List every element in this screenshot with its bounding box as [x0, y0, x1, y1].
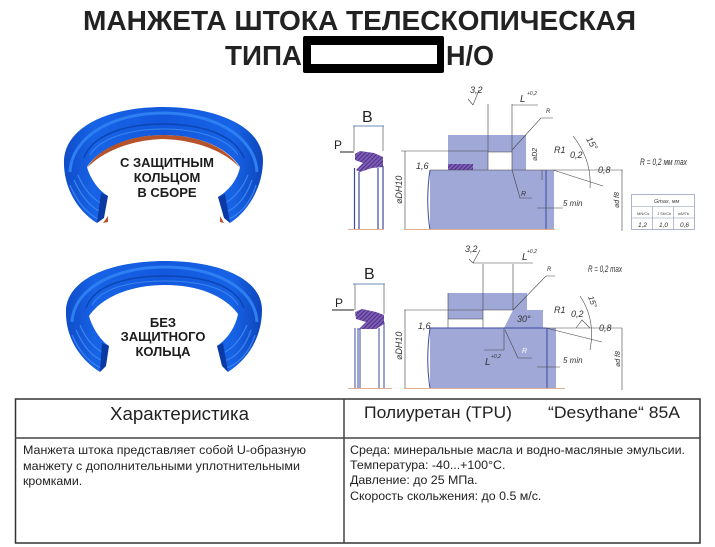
diagram: upper groove drawing: R1	[554, 145, 566, 155]
note: upper radius: R = 0,2 мм max	[640, 157, 687, 167]
diagram: upper groove drawing: ⌀D2	[532, 148, 539, 161]
table: small clearance: 0,6	[680, 222, 689, 229]
diagram: upper groove drawing: 15°	[584, 135, 600, 152]
diagram: lower groove drawing	[394, 244, 622, 390]
diagram: lower groove drawing: +0,2	[491, 354, 501, 360]
table: characteristics	[15, 399, 700, 543]
diagram: lower groove drawing: L	[485, 357, 491, 368]
diagram: lower groove drawing: 30°	[517, 314, 531, 324]
operating parameters text: Скорость скольжения: до 0.5 м/с.	[350, 489, 541, 503]
label: without protective ring: КОЛЬЦА	[135, 344, 191, 359]
table header: material: Полиуретан (TPU)	[364, 403, 512, 422]
label: with protective ring: В СБОРЕ	[137, 185, 197, 200]
diagram: upper groove drawing: L	[520, 94, 526, 105]
diagram: lower groove drawing: R	[547, 267, 552, 273]
title: Н/О	[446, 40, 494, 71]
operating parameters text: Температура: -40...+100°С.	[350, 458, 505, 472]
diagram: lower groove drawing: 5 min	[563, 356, 583, 365]
operating parameters text	[350, 443, 685, 503]
description text: Манжета штока представляет собой U-образную	[23, 443, 306, 457]
label: without protective ring: ЗАЩИТНОГО	[121, 329, 205, 344]
icon: seal without protective ring	[66, 261, 262, 372]
operating parameters text: Давление: до 25 МПа.	[350, 473, 478, 487]
diagram: lower groove drawing: 0,8	[599, 323, 612, 333]
diagram: lower groove drawing: R	[522, 348, 527, 355]
diagram: lower groove drawing: ⌀DH10	[394, 332, 404, 360]
label: without protective ring: БЕЗ	[150, 315, 176, 330]
label: without protective ring	[121, 315, 205, 359]
diagram: lower groove drawing: ⌀d f8	[615, 351, 622, 367]
diagram: upper groove drawing: ⌀d f8	[614, 192, 621, 208]
diagram: lower groove drawing: +0,2	[527, 249, 537, 255]
diagram: upper groove drawing: 1,6	[416, 161, 429, 171]
table header: material	[364, 403, 681, 422]
diagram: lower seal profile: В	[364, 266, 375, 283]
label: with protective ring	[120, 155, 214, 200]
table: small clearance: 1,0	[659, 222, 668, 229]
label: with protective ring: С ЗАЩИТНЫМ	[120, 155, 214, 170]
diagram: lower groove drawing: 1,6	[418, 321, 431, 331]
table: small clearance: J Sb/Cb	[657, 211, 672, 216]
diagram: lower groove drawing: R1	[554, 305, 566, 315]
table: small clearance	[632, 194, 694, 230]
diagram: lower groove drawing: 0,2	[571, 309, 584, 319]
description text	[23, 443, 306, 488]
table: small clearance: 1,2	[638, 222, 647, 229]
diagram: lower seal profile: P	[335, 296, 343, 310]
diagram: upper groove drawing: R	[521, 191, 526, 198]
icon: seal with protective ring	[64, 107, 263, 223]
diagram: lower groove drawing: L	[522, 252, 528, 263]
table header: material: “Desythane“ 85A	[548, 403, 681, 422]
diagram: upper groove drawing: ⌀DH10	[394, 176, 404, 204]
diagram: upper seal profile: В	[362, 109, 373, 126]
table header: characteristic: Характеристика	[110, 404, 250, 424]
operating parameters text: Среда: минеральные масла и водно-масляные эмульсии.	[350, 443, 685, 457]
label: with protective ring: КОЛЬЦОМ	[134, 170, 200, 185]
diagram: upper seal profile: P	[334, 138, 342, 152]
table: small clearance: e8/f7b	[678, 211, 690, 216]
description text: манжету с дополнительными уплотнительными	[23, 459, 300, 473]
diagram: upper groove drawing: 0,2	[570, 150, 583, 160]
table: small clearance: MN/Cs	[637, 211, 649, 216]
description text: кромками.	[23, 474, 82, 488]
diagram: upper groove drawing: 3,2	[470, 85, 483, 95]
table: small clearance: Gmax, мм	[654, 199, 679, 205]
diagram: lower groove drawing: 15°	[586, 295, 599, 310]
title	[83, 5, 636, 73]
title: МАНЖЕТА ШТОКА ТЕЛЕСКОПИЧЕСКАЯ	[83, 5, 636, 36]
diagram: lower groove drawing: 3,2	[465, 244, 478, 254]
diagram: upper groove drawing: 0,8	[598, 165, 611, 175]
diagram: upper groove drawing: R	[546, 109, 551, 115]
diagram: upper groove drawing: +0,2	[527, 91, 537, 97]
diagram: upper seal profile	[334, 109, 384, 230]
diagram: upper groove drawing	[394, 85, 623, 231]
diagram: lower seal profile	[332, 266, 392, 388]
diagram: upper groove drawing: 5 min	[563, 199, 583, 208]
title: ТИПА	[225, 40, 302, 71]
note: lower radius: R = 0,2 max	[588, 264, 622, 274]
